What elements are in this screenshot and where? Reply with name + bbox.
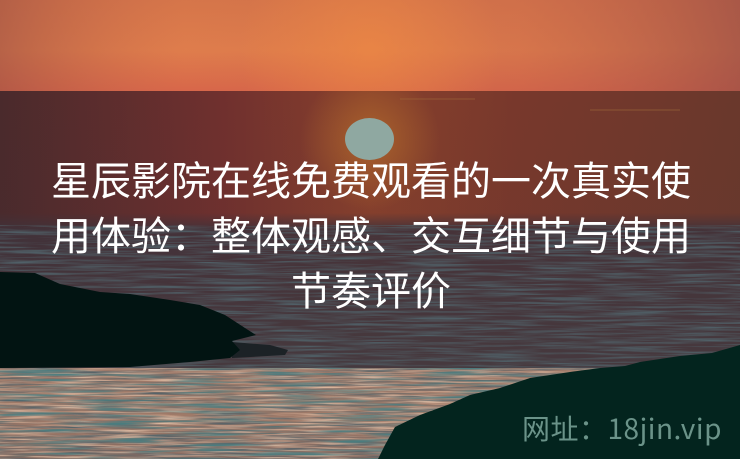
watermark: site address: 网址：18jin.vip <box>522 408 722 448</box>
left island <box>0 272 288 368</box>
sun <box>345 118 394 160</box>
right island <box>378 345 740 459</box>
sky <box>0 0 740 92</box>
title: 星辰影院在线免费观看的一次真实使用体验：整体观感、交互细节与使用节奏评价 <box>51 160 691 314</box>
